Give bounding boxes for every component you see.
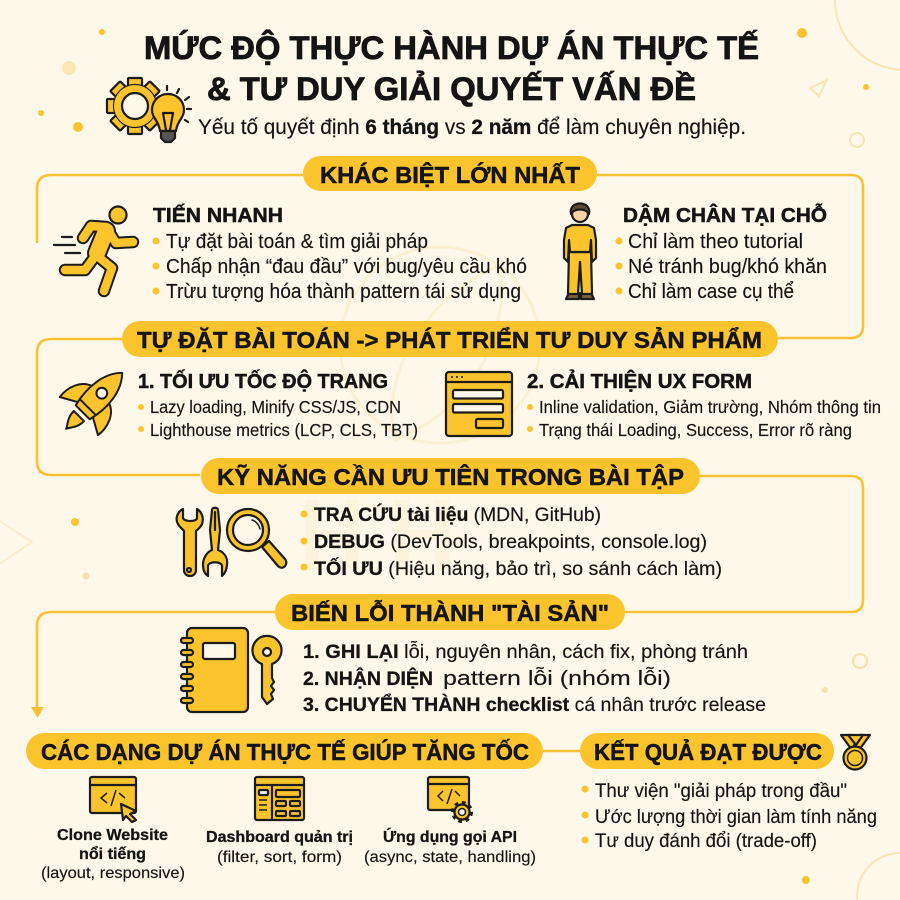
panel: results list: Ước lượng thời gian làm tính năng [595,807,877,828]
panel: tiến nhanh: Chấp nhận “đau đầu” với bug/yêu cầu khó [166,256,527,278]
panel: skills list: TỐI ƯU (Hiệu năng, bảo trì, so sánh cách làm) [314,558,722,580]
panel: biến lỗi thành tài sản heading [275,594,625,630]
panel: results list [582,781,877,852]
icon: medal [841,735,870,770]
panel: kết quả đạt được heading: KẾT QUẢ ĐẠT ĐƯỢC [594,737,822,765]
panel: tiến nhanh [152,204,527,303]
icon: key [252,636,282,704]
panel: cải thiện ux form: 2. CẢI THIỆN UX FORM [527,369,752,393]
panel: khác biệt lớn nhất heading [303,156,597,191]
panel: results list: Thư viện "giải pháp trong đầu" [595,781,847,802]
title: MỨC ĐỘ THỰC HÀNH DỰ ÁN THỰC TẾ [144,30,759,66]
panel: kỹ năng cần ưu tiên heading: KỸ NĂNG CẦN ƯU TIÊN TRONG BÀI TẬP [217,463,684,490]
project: clone website: Clone Website [57,827,168,844]
icon: rocket [47,353,142,448]
project: clone website [41,827,185,882]
title: & TƯ DUY GIẢI QUYẾT VẤN ĐỀ [207,71,696,107]
panel: results list: Tư duy đánh đổi (trade-off) [595,831,817,852]
panel: dậm chân tại chỗ [616,203,827,303]
panel: dậm chân tại chỗ: Né tránh bug/khó khăn [628,256,827,278]
panel: error steps: 1. GHI LẠI lỗi, nguyên nhân, cách fix, phòng tránh [303,640,748,663]
icon: notebook [181,628,248,712]
panel: dậm chân tại chỗ: Chỉ làm case cụ thể [628,281,794,303]
panel: tối ưu tốc độ trang: 1. TỐI ƯU TỐC ĐỘ TRANG [138,369,388,393]
panel: cải thiện ux form: Trạng thái Loading, Success, Error rõ ràng [539,420,852,440]
project: api app [364,827,536,866]
icon: api window with gear [428,777,471,821]
subtitle: Yếu tố quyết định 6 tháng vs 2 năm để làm chuyên nghiệp. [198,116,746,139]
panel: tiến nhanh: Tự đặt bài toán & tìm giải pháp [166,231,428,253]
project: dashboard: (filter, sort, form) [217,849,342,866]
panel: tự đặt bài toán heading: TỰ ĐẶT BÀI TOÁN -> PHÁT TRIỂN TƯ DUY SẢN PHẨM [137,325,762,353]
icon: standing person [564,204,596,299]
panel: tiến nhanh: Trừu tượng hóa thành pattern tái sử dụng [166,281,521,303]
project: dashboard [206,829,353,866]
panel: các dạng dự án heading [26,733,543,769]
panel: tiến nhanh: TIẾN NHANH [153,204,283,227]
icon: clone website window [90,777,136,822]
title [144,30,759,107]
panel: error steps: pattern lỗi (nhóm lỗi) [443,667,671,690]
panel: skills list [300,504,722,580]
panel: cải thiện ux form: Inline validation, Giảm trường, Nhóm thông tin [539,397,881,417]
project: api app: Ứng dụng gọi API [383,827,517,846]
panel: tự đặt bài toán heading [122,321,778,357]
panel: dậm chân tại chỗ: Chỉ làm theo tutorial [628,231,803,253]
panel: error steps: 2. NHẬN DIỆN [303,666,433,690]
panel: dậm chân tại chỗ: DẬM CHÂN TẠI CHỖ [623,203,827,227]
panel: skills list: DEBUG (DevTools, breakpoints, console.log) [314,532,707,553]
panel: cải thiện ux form [527,369,881,440]
panel: error steps: 3. CHUYỂN THÀNH checklist cá nhân trước release [303,693,766,716]
icon: wrench, screwdriver and magnifier [177,508,286,576]
panel: biến lỗi thành tài sản heading: BIẾN LỖI THÀNH "TÀI SẢN" [291,598,609,626]
project: clone website: (layout, responsive) [41,865,185,882]
project: api app: (async, state, handling) [364,849,536,866]
icon: gear and light bulb [107,78,191,142]
panel: khác biệt lớn nhất heading: KHÁC BIỆT LỚN NHẤT [320,161,581,188]
panel: kết quả đạt được heading [580,733,834,769]
panel: skills list: TRA CỨU tài liệu (MDN, GitHub) [314,504,601,526]
project: clone website: nổi tiếng [79,845,146,863]
panel: error steps [303,640,766,716]
panel: các dạng dự án heading: CÁC DẠNG DỰ ÁN THỰC TẾ GIÚP TĂNG TỐC [41,738,529,765]
icon: dashboard window [255,777,304,820]
panel: tối ưu tốc độ trang [138,369,418,440]
panel: tối ưu tốc độ trang: Lighthouse metrics (LCP, CLS, TBT) [150,420,418,440]
panel: kỹ năng cần ưu tiên heading [201,458,700,494]
panel: tối ưu tốc độ trang: Lazy loading, Minify CSS/JS, CDN [150,397,401,417]
icon: web form window [446,372,512,436]
connector lines [31,175,863,751]
project: dashboard: Dashboard quản trị [206,829,353,846]
icon: running person [54,206,133,291]
